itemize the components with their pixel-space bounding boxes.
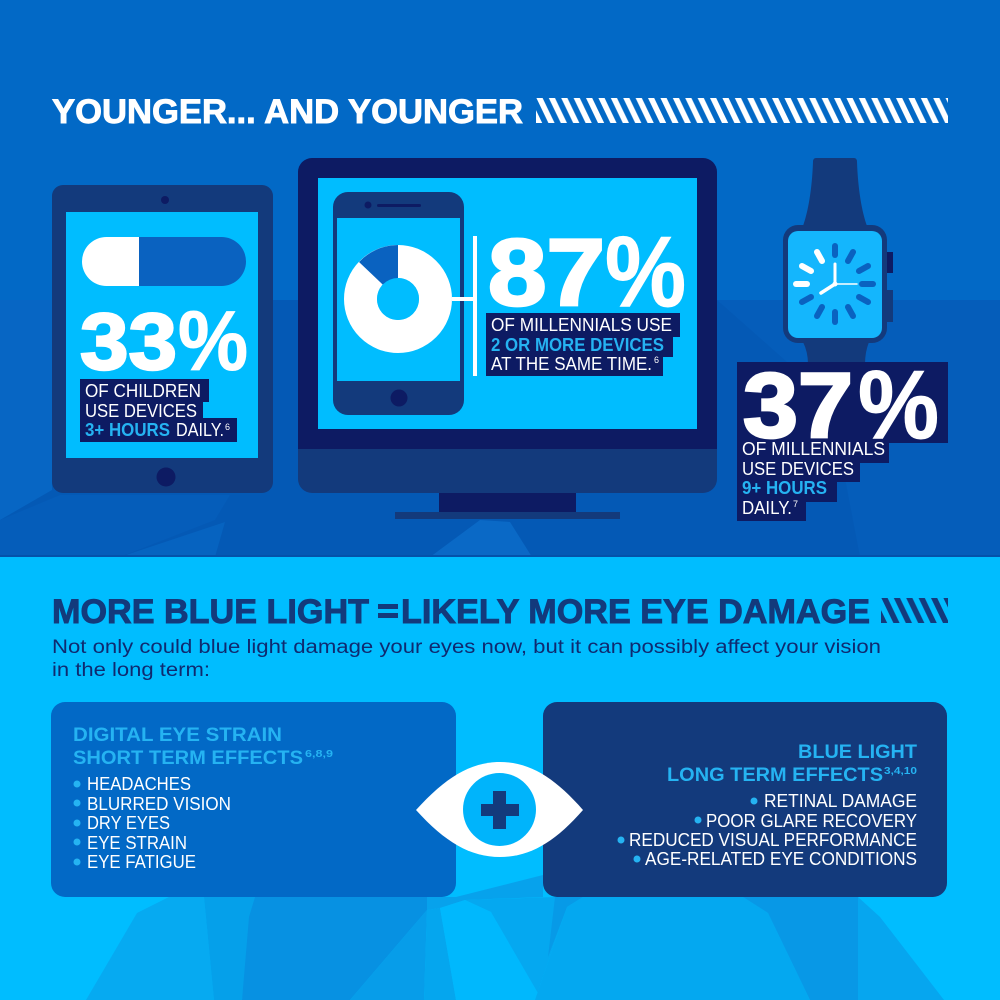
panel heading: DIGITAL EYE STRAIN bbox=[73, 725, 282, 746]
panel heading bbox=[667, 742, 918, 786]
effects list: AGE-RELATED EYE CONDITIONS bbox=[645, 849, 917, 869]
effects list: HEADACHES bbox=[87, 774, 191, 794]
donut chart 87 percent bbox=[359, 245, 436, 336]
caption: millennials multi-device: AT THE SAME TIME. bbox=[491, 354, 652, 374]
smartwatch device panel bbox=[737, 158, 948, 521]
stat: 33%: 33 bbox=[80, 297, 177, 386]
effects list bbox=[618, 791, 917, 869]
intro paragraph bbox=[52, 637, 881, 681]
caption: children: 3+ HOURS bbox=[85, 420, 170, 440]
phone bbox=[333, 192, 464, 415]
intro paragraph: in the long term: bbox=[52, 660, 210, 681]
caption block: 37%: DAILY. bbox=[742, 498, 792, 518]
caption: millennials multi-device: 6 bbox=[654, 355, 659, 365]
heading: more blue light: MORE BLUE LIGHT bbox=[52, 593, 369, 631]
monitor device panel bbox=[298, 158, 717, 519]
panel heading bbox=[73, 725, 334, 769]
background: bottom section bbox=[0, 557, 1000, 1000]
effects list: DRY EYES bbox=[87, 813, 170, 833]
panel heading: SHORT TERM EFFECTS bbox=[73, 748, 303, 769]
caption: millennials multi-device: 2 OR MORE DEVICES bbox=[491, 335, 664, 355]
panel: short term effects bbox=[51, 702, 456, 897]
tablet device panel bbox=[52, 185, 273, 493]
clock ticks bbox=[796, 246, 873, 322]
stat: 37%: % bbox=[858, 350, 939, 459]
caption: children: 6 bbox=[225, 422, 230, 432]
caption: children bbox=[80, 379, 237, 442]
stat: 37%: 37 bbox=[743, 355, 853, 457]
panel heading: LONG TERM EFFECTS bbox=[667, 765, 883, 786]
effects list: EYE FATIGUE bbox=[87, 852, 196, 872]
stat: 37% bbox=[743, 350, 939, 459]
clock hands bbox=[821, 264, 857, 293]
caption: millennials multi-device: OF MILLENNIALS USE bbox=[491, 315, 672, 335]
pill gauge 33 percent bbox=[82, 237, 246, 286]
caption block: 37% bbox=[737, 350, 948, 521]
background: top section bbox=[0, 0, 1000, 557]
connector line bbox=[452, 236, 477, 376]
effects list bbox=[74, 774, 231, 872]
panel heading: BLUE LIGHT bbox=[798, 742, 917, 763]
heading: more blue light bbox=[52, 593, 948, 631]
caption block: 37%: OF MILLENNIALS bbox=[742, 439, 885, 459]
caption block: 37%: 9+ HOURS bbox=[742, 478, 827, 498]
panel heading: 3,4,10 bbox=[884, 766, 918, 777]
heading: more blue light: LIKELY MORE EYE DAMAGE bbox=[401, 593, 870, 631]
heading: younger and younger bbox=[52, 93, 948, 131]
caption: children: DAILY. bbox=[176, 420, 224, 440]
caption: children: OF CHILDREN bbox=[85, 381, 201, 401]
stat: 33%: % bbox=[178, 294, 248, 388]
stat: 33% bbox=[80, 294, 248, 388]
intro paragraph: Not only could blue light damage your eyes now, but it can possibly affect your vision bbox=[52, 637, 881, 658]
stat: 87%: 87 bbox=[488, 220, 605, 326]
effects list: EYE STRAIN bbox=[87, 833, 187, 853]
stat: 87% bbox=[488, 216, 686, 328]
effects list: RETINAL DAMAGE bbox=[764, 791, 917, 811]
caption: millennials multi-device bbox=[486, 313, 680, 376]
heading: younger and younger: YOUNGER... AND YOUNGER bbox=[52, 93, 523, 131]
effects list: POOR GLARE RECOVERY bbox=[706, 811, 917, 831]
caption block: 37%: 7 bbox=[793, 499, 798, 509]
stat: 87%: % bbox=[605, 216, 686, 328]
effects list: BLURRED VISION bbox=[87, 794, 231, 814]
caption: children: USE DEVICES bbox=[85, 401, 197, 421]
caption block: 37%: USE DEVICES bbox=[742, 459, 854, 479]
panel: long term effects bbox=[543, 702, 947, 897]
icon: eye with plus bbox=[416, 762, 583, 857]
panel heading: 6,8,9 bbox=[305, 749, 334, 760]
effects list: REDUCED VISUAL PERFORMANCE bbox=[629, 830, 917, 850]
